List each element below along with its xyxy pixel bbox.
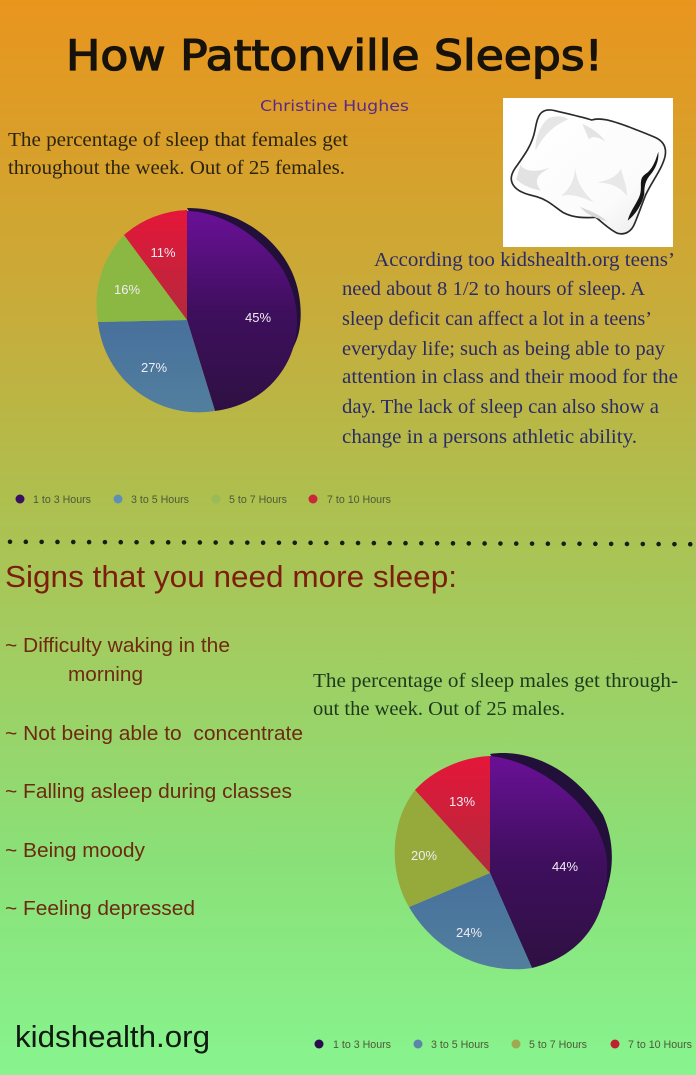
paragraph: sleep facts: day. The lack of sleep can also show a <box>342 396 659 418</box>
male chart caption: The percentage of sleep males get through- <box>313 670 678 692</box>
percentage labels <box>411 794 578 940</box>
list: signs: ~ Difficulty waking in the <box>5 634 230 657</box>
icon: pillow <box>503 98 673 247</box>
female chart caption: The percentage of sleep that females get <box>8 129 348 151</box>
slice: 5 to 7 hours 20% <box>395 790 490 907</box>
legend: females: 3 to 5 Hours <box>131 494 189 506</box>
paragraph: sleep facts: According too kidshealth.org teens’ <box>374 249 675 271</box>
percentage labels: 44% <box>552 859 578 874</box>
pie chart: females <box>96 208 301 412</box>
author name: Christine Hughes <box>260 97 409 115</box>
male chart caption <box>313 670 678 720</box>
percentage labels: 20% <box>411 848 437 863</box>
legend: females: 5 to 7 Hours <box>229 494 287 506</box>
paragraph: sleep facts: need about 8 1/2 to hours of sleep. A <box>342 278 646 300</box>
slice: 1 to 3 hours 44% <box>490 756 607 968</box>
legend: males <box>314 1039 692 1051</box>
list: signs: ~ Falling asleep during classes <box>5 780 292 803</box>
list: signs: ~ Not being able to concentrate <box>5 722 303 745</box>
legend: females: 7 to 10 Hours <box>327 494 391 506</box>
slice: 1 to 3 hours 45% <box>187 211 297 411</box>
paragraph: sleep facts: everyday life; such as being able to pay <box>342 338 665 360</box>
title: How Pattonville Sleeps! <box>66 31 603 80</box>
female chart caption: throughout the week. Out of 25 females. <box>8 157 345 179</box>
heading: signs you need more sleep: Signs that you need more sleep: <box>5 559 457 594</box>
pie shadow crescent <box>187 208 301 348</box>
paragraph: sleep facts: change in a persons athletic ability. <box>342 426 637 448</box>
percentage labels: 11% <box>150 245 176 260</box>
list: signs: ~ Feeling depressed <box>5 897 195 920</box>
legend: males: 1 to 3 Hours <box>333 1039 391 1051</box>
paragraph: sleep facts <box>342 249 678 448</box>
female chart caption <box>8 129 348 179</box>
percentage labels: 24% <box>456 925 482 940</box>
percentage labels: 13% <box>449 794 475 809</box>
slice: 7 to 10 hours 11% <box>124 210 187 320</box>
pie shadow crescent <box>490 753 612 900</box>
slice: 5 to 7 hours 16% <box>96 235 187 322</box>
slice: 7 to 10 hours 13% <box>415 756 490 873</box>
legend: males: 5 to 7 Hours <box>529 1039 587 1051</box>
percentage labels <box>114 245 271 375</box>
source: kidshealth.org: kidshealth.org <box>15 1019 210 1054</box>
percentage labels: 45% <box>245 310 271 325</box>
percentage labels: 16% <box>114 282 140 297</box>
slice: 3 to 5 hours 27% <box>98 320 215 412</box>
percentage labels: 27% <box>141 360 167 375</box>
list: signs: morning <box>68 663 143 686</box>
slice: 3 to 5 hours 24% <box>409 873 532 969</box>
paragraph: sleep facts: attention in class and their mood for the <box>342 366 678 388</box>
legend: females: 1 to 3 Hours <box>33 494 91 506</box>
list: signs: ~ Being moody <box>5 839 146 862</box>
list: signs <box>5 634 303 920</box>
pie chart: males <box>395 753 612 969</box>
male chart caption: out the week. Out of 25 males. <box>313 698 565 720</box>
legend: males: 7 to 10 Hours <box>628 1039 692 1051</box>
paragraph: sleep facts: sleep deficit can affect a lot in a teens’ <box>342 308 652 330</box>
legend: females <box>16 494 391 506</box>
legend: males: 3 to 5 Hours <box>431 1039 489 1051</box>
